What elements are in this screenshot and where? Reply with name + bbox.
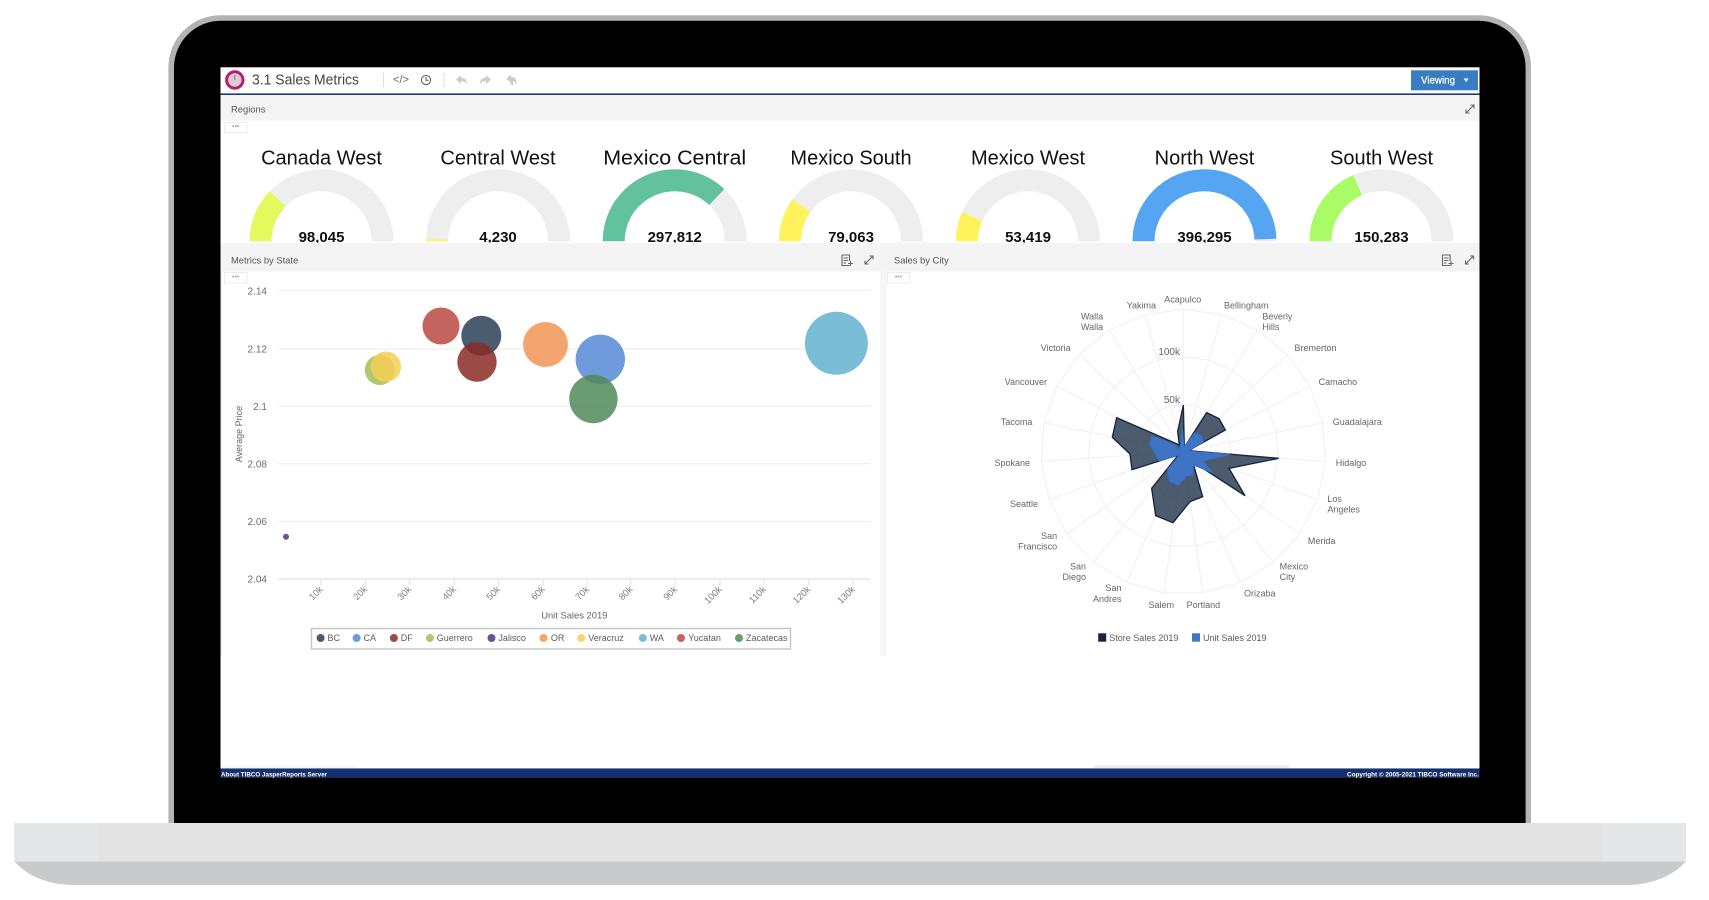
footer bar: Copyright © 2005-2021 TIBCO Software Inc. — [1347, 770, 1479, 778]
gauge: Canada West: 98,045 — [299, 229, 344, 246]
menu button: ••• — [232, 124, 240, 131]
bubble chart legend: WA — [650, 633, 664, 643]
gauge: Mexico Central — [603, 147, 747, 246]
bubble chart legend: Yucatan — [688, 633, 721, 643]
gauge: Mexico South — [779, 147, 923, 246]
y axis grid and labels: 2.14 — [248, 286, 267, 298]
x axis ticks and labels — [306, 579, 857, 606]
bubble: DF — [457, 342, 497, 382]
gauge: Central West: 4,230 — [479, 229, 517, 246]
x axis ticks and labels: 100k — [702, 583, 724, 606]
x axis ticks and labels: 30k — [395, 583, 414, 602]
sales header: Sales by City — [894, 254, 949, 266]
bubble chart legend: Jalisco — [498, 633, 526, 643]
bubble: Zacatecas — [569, 375, 618, 423]
metrics header — [231, 254, 873, 266]
radar value labels — [1158, 347, 1181, 406]
radar category labels: Spokane — [994, 458, 1030, 468]
radar category labels: Merida — [1308, 536, 1335, 546]
bubble: WA — [805, 312, 868, 375]
regions header: Regions — [231, 104, 266, 114]
x axis ticks and labels: 120k — [790, 583, 813, 606]
gauge: South West — [1310, 147, 1454, 246]
sales header — [894, 254, 1474, 266]
y axis grid and labels: 2.08 — [248, 460, 267, 470]
y axis grid and labels: 2.12 — [248, 344, 267, 356]
bubble chart — [234, 286, 870, 649]
radar category labels: Yakima — [1127, 300, 1156, 310]
radar value labels: 50k — [1164, 395, 1181, 406]
radar grid — [1041, 309, 1325, 593]
icon: clock — [421, 75, 431, 85]
x axis ticks and labels: 90k — [661, 583, 679, 602]
gauge: Mexico West: Mexico West — [971, 147, 1085, 169]
menu button: ••• — [895, 274, 903, 281]
radar category labels: Guadalajara — [1333, 417, 1382, 427]
gauge: Canada West: Canada West — [261, 147, 382, 169]
viewing button: Viewing — [1421, 76, 1455, 86]
regions header — [220, 95, 1480, 121]
bubble: CA — [576, 335, 625, 384]
radar category labels: Victoria — [1041, 343, 1071, 353]
gauge: Mexico West: 53,419 — [1005, 229, 1051, 246]
radar category labels: Mexico — [1280, 562, 1308, 572]
bubble: Veracruz — [371, 352, 401, 382]
radar legend: Unit Sales 2019 — [1203, 633, 1267, 643]
radar category labels: Salem — [1148, 600, 1174, 610]
radar category labels: Beverly — [1262, 312, 1293, 322]
radar category labels: Portland — [1187, 600, 1220, 610]
radar category labels: Los — [1327, 494, 1342, 504]
x axis ticks and labels: 60k — [528, 583, 547, 602]
bubble chart legend — [312, 628, 790, 649]
gauge: Mexico Central: Mexico Central — [603, 147, 746, 169]
panel headers row — [220, 243, 1480, 656]
radar legend — [1098, 633, 1267, 643]
radar value labels: 100k — [1158, 347, 1181, 358]
radar chart — [994, 294, 1382, 643]
radar category labels: Francisco — [1018, 542, 1057, 552]
radar category labels: Camacho — [1319, 377, 1357, 387]
x axis ticks and labels: 20k — [351, 583, 369, 602]
radar category labels: Bremerton — [1294, 343, 1337, 353]
radar category labels: Hills — [1262, 322, 1280, 332]
radar category labels: Vancouver — [1005, 377, 1047, 387]
radar category labels: Walla — [1081, 312, 1103, 322]
x axis ticks and labels: 40k — [440, 583, 458, 602]
y axis title: Average Price — [234, 406, 244, 462]
bubble chart legend: BC — [328, 633, 341, 643]
bubble chart legend: Guerrero — [437, 633, 473, 643]
footer bar — [220, 765, 1480, 778]
radar category labels: Tacoma — [1001, 417, 1032, 427]
x axis title: Unit Sales 2019 — [541, 610, 607, 620]
panel: regions — [220, 95, 1480, 246]
laptop lid and bezel — [168, 15, 1531, 823]
x axis ticks and labels: 110k — [746, 583, 768, 605]
gauge: Mexico West — [956, 147, 1100, 246]
radar category labels: Bellingham — [1224, 300, 1269, 310]
radar category labels: San — [1105, 583, 1122, 593]
dashboard screen — [220, 67, 1480, 779]
x axis ticks and labels: 130k — [835, 583, 857, 606]
radar category labels: Walla — [1081, 322, 1103, 332]
radar category labels: Hidalgo — [1336, 458, 1366, 468]
icon: code view: </> — [393, 74, 409, 86]
icon: dashboard logo — [227, 72, 243, 88]
y axis grid and labels: 2.06 — [248, 517, 267, 528]
radar category labels: San — [1070, 562, 1086, 572]
bubble chart legend: Zacatecas — [746, 633, 788, 643]
x axis ticks and labels: 10k — [306, 583, 325, 602]
icon: undo — [456, 75, 467, 84]
menu button — [888, 272, 910, 283]
icon: undo all — [506, 74, 516, 86]
menu button — [224, 122, 247, 132]
bubble chart legend: OR — [551, 633, 565, 643]
bubble: BC — [461, 316, 501, 356]
y axis grid and labels: 2.1 — [253, 402, 267, 413]
radar category labels: Andres — [1093, 594, 1122, 604]
panel: metrics by state — [224, 254, 873, 649]
bubble chart legend: CA — [364, 633, 376, 643]
bubble: OR — [523, 322, 568, 367]
bubble chart legend: DF — [401, 633, 413, 643]
toolbar — [220, 70, 1480, 95]
x axis ticks and labels: 70k — [573, 583, 591, 602]
radar category labels: Acapulco — [1164, 294, 1201, 304]
x axis ticks and labels: 50k — [484, 583, 503, 602]
gauge: North West: 396,295 — [1177, 229, 1232, 246]
radar category labels: Seattle — [1010, 499, 1038, 509]
gauge: South West: 150,283 — [1354, 229, 1409, 246]
x axis ticks and labels: 80k — [616, 583, 635, 602]
bubble: Jalisco — [283, 534, 289, 540]
y axis grid and labels — [248, 286, 870, 586]
menu button — [224, 272, 247, 283]
laptop base — [14, 823, 1686, 885]
gauge: South West: South West — [1330, 147, 1433, 169]
bubble: Guerrero — [365, 355, 395, 385]
gauge: Mexico South: 79,063 — [828, 229, 874, 246]
gauge: Canada West — [250, 147, 394, 246]
radar series: unit sales — [1150, 429, 1229, 485]
radar category labels: City — [1280, 572, 1296, 582]
footer bar: About TIBCO JasperReports Server — [221, 772, 327, 778]
radar category labels: Orizaba — [1244, 588, 1276, 598]
gauge: Central West — [426, 147, 570, 246]
viewing button — [1411, 70, 1478, 90]
panel: sales by city — [888, 254, 1474, 643]
radar legend: Store Sales 2019 — [1109, 633, 1178, 643]
radar category labels: San — [1041, 531, 1057, 541]
gauge: Central West: Central West — [440, 147, 556, 169]
metrics header: Metrics by State — [231, 254, 298, 266]
radar category labels: Diego — [1062, 572, 1086, 582]
gauge: Mexico Central: 297,812 — [648, 229, 702, 246]
bubble: Yucatan — [422, 308, 460, 344]
radar series: store sales — [1112, 405, 1279, 523]
radar category labels: Angeles — [1327, 504, 1360, 514]
radar category labels — [994, 294, 1382, 610]
gauge: North West: North West — [1155, 147, 1255, 169]
bubble chart legend: Veracruz — [588, 633, 624, 643]
gauge: North West — [1132, 147, 1276, 246]
dashboard title: 3.1 Sales Metrics — [252, 72, 359, 88]
y axis grid and labels: 2.04 — [248, 574, 267, 586]
gauge: Mexico South: Mexico South — [790, 147, 912, 169]
menu button: ••• — [232, 274, 240, 281]
icon: redo — [480, 75, 491, 84]
